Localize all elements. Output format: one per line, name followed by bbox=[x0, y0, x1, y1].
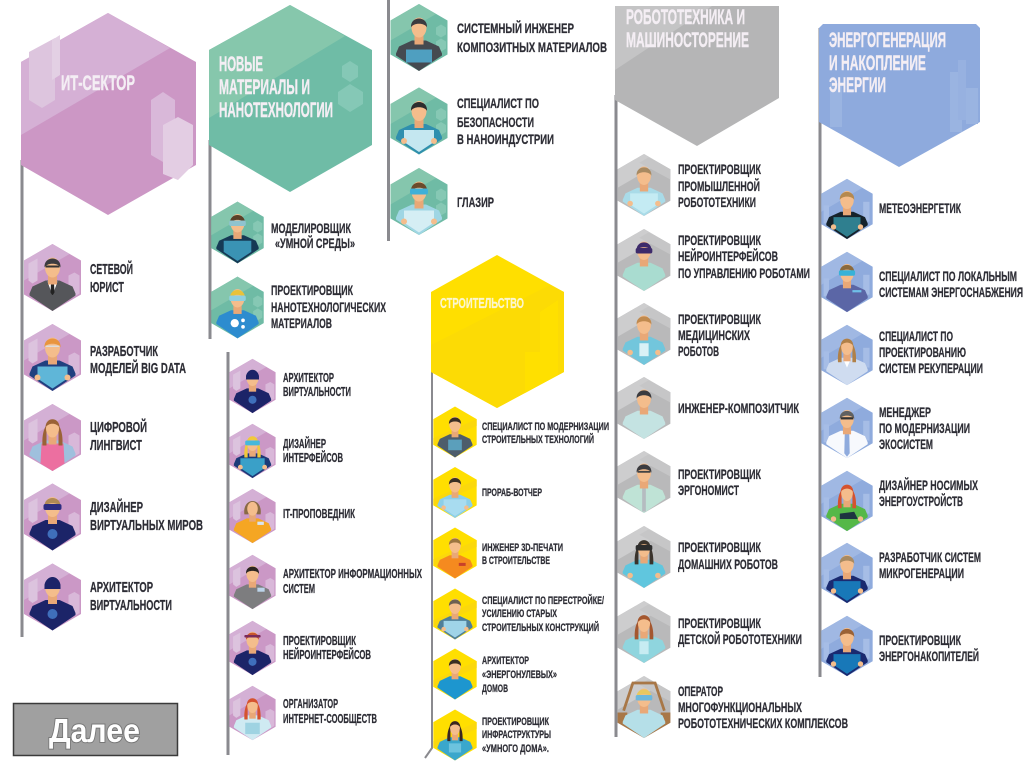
item: virtuality architect: АРХИТЕКТОР bbox=[283, 370, 334, 385]
item: home robots designer: ПРОЕКТИРОВЩИК bbox=[678, 539, 761, 555]
item: recuperation systems specialist bbox=[821, 325, 983, 385]
item: interface designer: ДИЗАЙНЕР bbox=[283, 436, 326, 451]
item: information systems architect: СИСТЕМ bbox=[283, 581, 315, 596]
item: children's robotics designer: ПРОЕКТИРОВЩИК bbox=[678, 615, 761, 631]
item: medical robots designer: МЕДИЦИНСКИХ bbox=[678, 327, 750, 343]
item: construction modernisation specialist: СТРОИТЕЛЬНЫХ ТЕХНОЛОГИЙ bbox=[482, 433, 594, 446]
item: microgeneration developer: МИКРОГЕНЕРАЦИИ bbox=[879, 565, 964, 581]
item: online community organiser: ОРГАНИЗАТОР bbox=[283, 696, 338, 711]
item: nano safety specialist bbox=[390, 88, 554, 154]
item: ergonomist designer: ПРОЕКТИРОВЩИК bbox=[678, 466, 761, 482]
item: digital linguist: ЦИФРОВОЙ bbox=[90, 418, 147, 436]
item: rebuilding specialist bbox=[433, 589, 604, 639]
item: network lawyer: ЮРИСТ bbox=[90, 279, 124, 296]
item: IT evangelist: IT-ПРОПОВЕДНИК bbox=[283, 506, 355, 521]
button: next: Далее bbox=[49, 712, 140, 749]
item: composite engineer: ИНЖЕНЕР-КОМПОЗИТЧИК bbox=[678, 400, 799, 416]
item: composite systems engineer: КОМПОЗИТНЫХ МАТЕРИАЛОВ bbox=[457, 39, 607, 55]
item: ergonomist designer: ЭРГОНОМИСТ bbox=[678, 482, 739, 498]
item: wearable energy devices designer: ЭНЕРГОУСТРОЙСТВ bbox=[879, 492, 963, 509]
item: local energy systems specialist bbox=[821, 252, 1023, 312]
item: medical robots designer: РОБОТОВ bbox=[678, 343, 719, 359]
item: zero-energy house architect: АРХИТЕКТОР bbox=[482, 655, 529, 667]
item: smart home infrastructure designer bbox=[433, 710, 551, 760]
item: zero-energy house architect: ДОМОВ bbox=[482, 683, 508, 695]
item: composite systems engineer bbox=[390, 4, 607, 71]
item: recuperation systems specialist: ПРОЕКТИРОВАНИЮ bbox=[879, 344, 966, 360]
hexagon heading: new materials: МАТЕРИАЛЫ И bbox=[219, 76, 310, 99]
panel: robotics and mechanical engineering bbox=[615, 6, 848, 738]
item: recuperation systems specialist: СПЕЦИАЛИСТ ПО bbox=[879, 328, 953, 344]
hexagon heading: IT sector bbox=[21, 13, 196, 215]
item: industrial robotics designer: ПРОМЫШЛЕННОЙ bbox=[678, 177, 760, 194]
item: foreman-watcher bbox=[433, 467, 542, 518]
item: multifunctional robotics operator: МНОГОФУНКЦИОНАЛЬНЫХ bbox=[678, 699, 802, 715]
item: smart environment modeller: МОДЕЛИРОВЩИК bbox=[271, 220, 351, 236]
item: digital linguist bbox=[24, 404, 147, 471]
item: virtuality architect: ВИРТУАЛЬНОСТИ bbox=[283, 384, 351, 399]
item: neurointerface robot control designer: ПО УПРАВЛЕНИЮ РОБОТАМИ bbox=[678, 265, 810, 281]
item: big data developer: МОДЕЛЕЙ BIG DATA bbox=[90, 359, 186, 377]
item: ergonomist designer bbox=[618, 451, 761, 513]
hexagon heading: IT sector: ИТ-СЕКТОР bbox=[61, 72, 135, 95]
item: children's robotics designer: ДЕТСКОЙ РОБОТОТЕХНИКИ bbox=[678, 630, 802, 647]
item: home robots designer: ДОМАШНИХ РОБОТОВ bbox=[678, 556, 778, 572]
item: 3D printing engineer bbox=[433, 528, 563, 578]
item: medical robots designer: ПРОЕКТИРОВЩИК bbox=[678, 311, 761, 327]
item: children's robotics designer bbox=[618, 601, 802, 663]
item: ecosystem modernisation manager: ПО МОДЕРНИЗАЦИИ bbox=[879, 420, 970, 436]
item: 3D printing engineer: ИНЖЕНЕР 3D-ПЕЧАТИ bbox=[482, 542, 563, 554]
item: virtuality architect bbox=[229, 359, 351, 413]
item: nano safety specialist: БЕЗОПАСНОСТИ bbox=[457, 114, 534, 130]
item: digital linguist: ЛИНГВИСТ bbox=[90, 437, 142, 454]
item: neurointerface robot control designer: ПРОЕКТИРОВЩИК bbox=[678, 232, 761, 248]
panel: power generation and energy storage bbox=[819, 24, 1023, 677]
item: smart home infrastructure designer: ПРОЕКТИРОВЩИК bbox=[482, 716, 549, 728]
item: information systems architect bbox=[229, 555, 422, 609]
hexagon heading: robotics bbox=[615, 6, 779, 146]
item: smart environment modeller: «УМНОЙ СРЕДЫ» bbox=[275, 234, 355, 251]
item: IT evangelist bbox=[229, 489, 355, 543]
item: rebuilding specialist: УСИЛЕНИЮ СТАРЫХ bbox=[482, 608, 557, 620]
item: neurointerface designer: ПРОЕКТИРОВЩИК bbox=[283, 633, 356, 648]
hexagon heading: energy: И НАКОПЛЕНИЕ bbox=[829, 52, 926, 75]
item: ecosystem modernisation manager: ЭКОСИСТЕМ bbox=[879, 436, 933, 452]
item: home robots designer bbox=[618, 526, 778, 588]
item: construction modernisation specialist: СПЕЦИАЛИСТ ПО МОДЕРНИЗАЦИИ bbox=[482, 421, 609, 433]
button: next bbox=[14, 704, 178, 756]
hexagon heading: robotics: РОБОТОТЕХНИКА И bbox=[626, 6, 745, 29]
item: virtual worlds designer: ВИРТУАЛЬНЫХ МИРОВ bbox=[90, 517, 203, 534]
item: nanotech materials designer: НАНОТЕХНОЛОГИЧЕСКИХ bbox=[271, 299, 386, 315]
panel: construction bbox=[425, 255, 609, 760]
item: 3D printing engineer: В СТРОИТЕЛЬСТВЕ bbox=[482, 555, 550, 567]
item: meteo energy specialist bbox=[821, 179, 961, 239]
hexagon heading: new materials: НАНОТЕХНОЛОГИИ bbox=[219, 99, 333, 122]
item: rebuilding specialist: СПЕЦИАЛИСТ ПО ПЕРЕСТРОЙКЕ/ bbox=[482, 594, 604, 607]
item: virtual worlds designer bbox=[24, 484, 203, 550]
item: multifunctional robotics operator: ОПЕРАТОР bbox=[678, 683, 723, 699]
item: zero-energy house architect bbox=[433, 649, 557, 699]
item: glazier bbox=[390, 168, 494, 235]
item: industrial robotics designer: ПРОЕКТИРОВЩИК bbox=[678, 161, 761, 177]
item: composite systems engineer: СИСТЕМНЫЙ ИНЖЕНЕР bbox=[457, 19, 574, 36]
item: industrial robotics designer: РОБОТОТЕХНИКИ bbox=[678, 194, 756, 210]
hexagon heading: construction: СТРОИТЕЛЬСТВО bbox=[440, 295, 524, 312]
panel: new materials continued bbox=[388, 0, 607, 241]
item: meteo energy specialist: МЕТЕОЭНЕРГЕТИК bbox=[879, 200, 961, 216]
item: big data developer bbox=[24, 324, 186, 391]
hexagon heading: energy bbox=[819, 24, 980, 167]
item: composite engineer bbox=[618, 377, 799, 439]
item: nanotech materials designer bbox=[211, 277, 386, 338]
item: neurointerface robot control designer: НЕЙРОИНТЕРФЕЙСОВ bbox=[678, 247, 778, 264]
hexagon heading: construction bbox=[431, 255, 564, 408]
item: smart home infrastructure designer: ИНФРАСТРУКТУРЫ bbox=[482, 729, 551, 741]
item: online community organiser: ИНТЕРНЕТ-СООБЩЕСТВ bbox=[283, 711, 377, 726]
item: multifunctional robotics operator: РОБОТОТЕХНИЧЕСКИХ КОМПЛЕКСОВ bbox=[678, 715, 848, 731]
item: virtuality architect bbox=[24, 564, 172, 630]
item: interface designer: ИНТЕРФЕЙСОВ bbox=[283, 450, 343, 465]
item: network lawyer: СЕТЕВОЙ bbox=[90, 260, 133, 278]
item: big data developer: РАЗРАБОТЧИК bbox=[90, 343, 159, 360]
item: neurointerface robot control designer bbox=[618, 229, 810, 291]
item: neurointerface designer: НЕЙРОИНТЕРФЕЙСОВ bbox=[283, 647, 371, 662]
hexagon heading: energy: ЭНЕРГИИ bbox=[829, 74, 886, 97]
item: information systems architect: АРХИТЕКТОР ИНФОРМАЦИОННЫХ bbox=[283, 566, 422, 581]
item: medical robots designer bbox=[618, 303, 761, 365]
item: energy storage designer bbox=[821, 616, 979, 676]
item: ecosystem modernisation manager: МЕНЕДЖЕР bbox=[879, 404, 931, 420]
panel: IT sector continued bbox=[228, 352, 422, 755]
panel: IT sector bbox=[21, 13, 203, 637]
item: virtuality architect: АРХИТЕКТОР bbox=[90, 579, 153, 596]
item: foreman-watcher: ПРОРАБ-ВОТЧЕР bbox=[482, 487, 542, 499]
item: nano safety specialist: В НАНОИНДУСТРИИ bbox=[457, 131, 554, 147]
item: glazier: ГЛАЗИР bbox=[457, 194, 494, 210]
item: neurointerface designer bbox=[229, 621, 371, 675]
item: zero-energy house architect: «ЭНЕРГОНУЛЕВЫХ» bbox=[482, 669, 557, 681]
item: interface designer bbox=[229, 424, 343, 478]
item: construction modernisation specialist bbox=[433, 407, 609, 457]
item: industrial robotics designer bbox=[618, 154, 761, 216]
item: smart environment modeller bbox=[211, 202, 355, 263]
item: energy storage designer: ПРОЕКТИРОВЩИК bbox=[879, 632, 961, 648]
item: network lawyer bbox=[24, 244, 133, 311]
item: virtual worlds designer: ДИЗАЙНЕР bbox=[90, 498, 143, 516]
item: ecosystem modernisation manager bbox=[821, 398, 970, 458]
item: nanotech materials designer: МАТЕРИАЛОВ bbox=[271, 315, 332, 331]
item: rebuilding specialist: СТРОИТЕЛЬНЫХ КОНСТРУКЦИЙ bbox=[482, 621, 599, 634]
item: online community organiser bbox=[229, 686, 377, 740]
item: multifunctional robotics operator bbox=[618, 676, 848, 738]
item: virtuality architect: ВИРТУАЛЬНОСТИ bbox=[90, 597, 172, 614]
hexagon heading: robotics: МАШИНОСТОРЕНИЕ bbox=[626, 29, 749, 52]
panel: new materials and nanotechnology bbox=[209, 5, 386, 339]
item: microgeneration developer bbox=[821, 543, 981, 603]
item: smart home infrastructure designer: «УМНОГО ДОМА». bbox=[482, 743, 549, 755]
item: nano safety specialist: СПЕЦИАЛИСТ ПО bbox=[457, 95, 539, 111]
item: wearable energy devices designer bbox=[821, 471, 978, 531]
hexagon heading: new materials: НОВЫЕ bbox=[219, 53, 263, 76]
hexagon heading: new materials bbox=[209, 5, 372, 192]
item: nanotech materials designer: ПРОЕКТИРОВЩИК bbox=[271, 282, 353, 298]
